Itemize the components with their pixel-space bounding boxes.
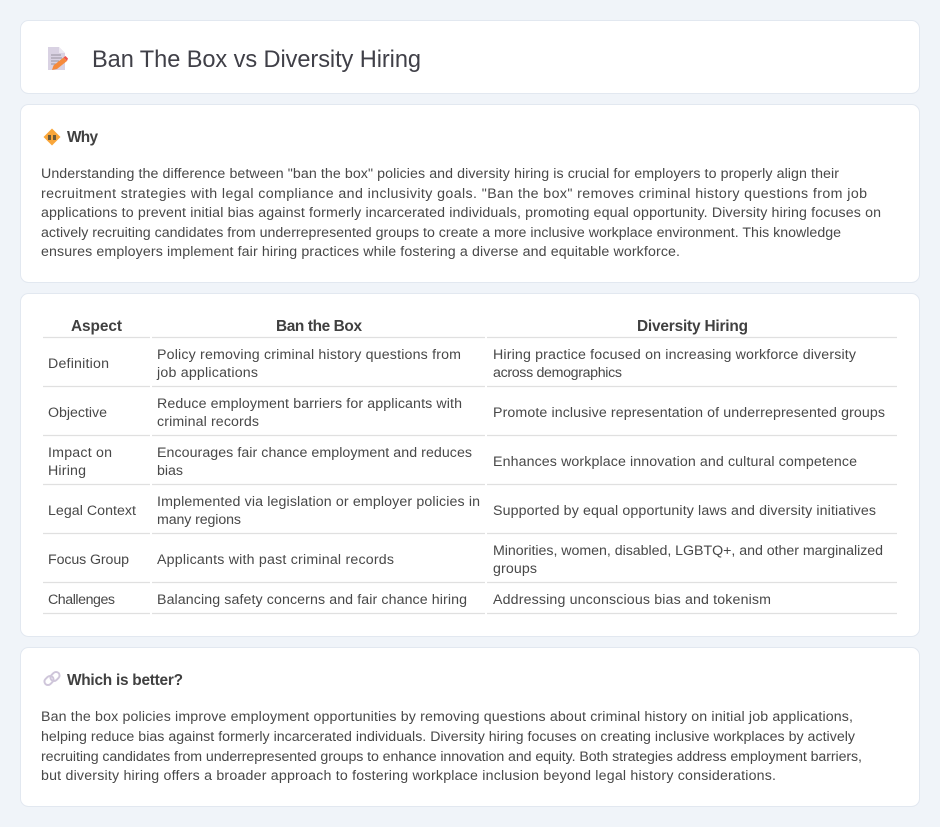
row: objective: Objective xyxy=(48,405,107,421)
table header: Ban the Box xyxy=(276,318,362,335)
row: impact on hiring: Hiring xyxy=(48,463,86,479)
text block: why paragraph: applications to prevent initial bias against formerly incarcerated individuals, promoting equal opportunity. Diversity hiring focuses on xyxy=(41,205,881,221)
table header: Aspect xyxy=(71,318,122,335)
row: objective: Reduce employment barriers for applicants with xyxy=(157,396,462,412)
text block: verdict paragraph xyxy=(41,709,862,784)
text block: verdict paragraph: recruiting candidates from underrepresented groups to enhance innovation and equity. Both strategies address employment barriers, xyxy=(41,749,862,765)
icon: link xyxy=(43,670,61,687)
row: focus group: Applicants with past criminal records xyxy=(157,552,394,568)
row: definition: Hiring practice focused on increasing workforce diversity xyxy=(493,347,857,363)
panel: which is better xyxy=(20,648,920,806)
heading: which is better: Which is better? xyxy=(67,672,183,689)
row: focus group: Minorities, women, disabled, LGBTQ+, and other marginalized xyxy=(493,543,883,559)
text block: verdict paragraph: but diversity hiring offers a broader approach to fostering workplace inclusion beyond legal history considerations. xyxy=(41,768,776,784)
row: impact on hiring: Impact on xyxy=(48,445,112,461)
row: definition: across demographics xyxy=(493,365,622,381)
panel: comparison table xyxy=(20,294,920,636)
row: definition: Policy removing criminal history questions from xyxy=(157,347,461,363)
text block: why paragraph: Understanding the difference between "ban the box" policies and diversity hiring is crucial for employers to properly align their xyxy=(41,166,839,182)
row: focus group: Focus Group xyxy=(48,552,129,568)
row: objective xyxy=(48,396,885,430)
row: definition: job applications xyxy=(156,365,258,381)
row: objective: criminal records xyxy=(157,414,259,430)
row: impact on hiring: bias xyxy=(157,463,183,479)
text block: verdict paragraph: Ban the box policies improve employment opportunities by removing questions about criminal history on initial job applications, xyxy=(41,709,853,725)
row: legal context: Legal Context xyxy=(48,503,136,519)
heading: why: Why xyxy=(67,129,98,146)
row: legal context: many regions xyxy=(157,512,241,528)
row: impact on hiring: Enhances workplace innovation and cultural competence xyxy=(493,454,857,470)
row: challenges: Balancing safety concerns and fair chance hiring xyxy=(157,592,467,608)
row: challenges: Challenges xyxy=(48,592,115,608)
panel: header xyxy=(20,20,920,94)
panel: why xyxy=(20,104,920,282)
row: focus group: groups xyxy=(493,561,537,577)
row: legal context: Supported by equal opportunity laws and diversity initiatives xyxy=(493,503,876,519)
row: focus group xyxy=(48,543,883,577)
row: definition xyxy=(48,347,857,381)
title: Ban The Box vs Diversity Hiring xyxy=(92,47,421,73)
row: definition: Definition xyxy=(48,356,109,372)
text block: why paragraph: actively recruiting candidates from underrepresented groups to create a more inclusive workplace environment. This knowledge xyxy=(41,225,841,241)
text block: why paragraph: recruitment strategies with legal compliance and inclusivity goals. "Ban the box" removes criminal history questions from job xyxy=(41,186,867,202)
row: impact on hiring: Encourages fair chance employment and reduces xyxy=(157,445,472,461)
row: legal context xyxy=(48,494,876,528)
row: legal context: Implemented via legislation or employer policies in xyxy=(157,494,480,510)
icon: warning diamond xyxy=(44,128,60,146)
row: challenges xyxy=(48,592,771,608)
table header xyxy=(71,318,748,335)
table header: Diversity Hiring xyxy=(637,318,748,335)
text block: why paragraph xyxy=(41,166,881,260)
text block: why paragraph: ensures employers implement fair hiring practices while fostering a diverse and equitable workforce. xyxy=(41,244,680,260)
row: objective: Promote inclusive representation of underrepresented groups xyxy=(493,405,885,421)
row: challenges: Addressing unconscious bias and tokenism xyxy=(493,592,771,608)
row: impact on hiring xyxy=(48,445,857,479)
text block: verdict paragraph: helping reduce bias against formerly incarcerated individuals. Diversity hiring focuses on creating inclusive workplaces by actively xyxy=(41,729,856,745)
icon: memo and pencil xyxy=(48,47,68,70)
